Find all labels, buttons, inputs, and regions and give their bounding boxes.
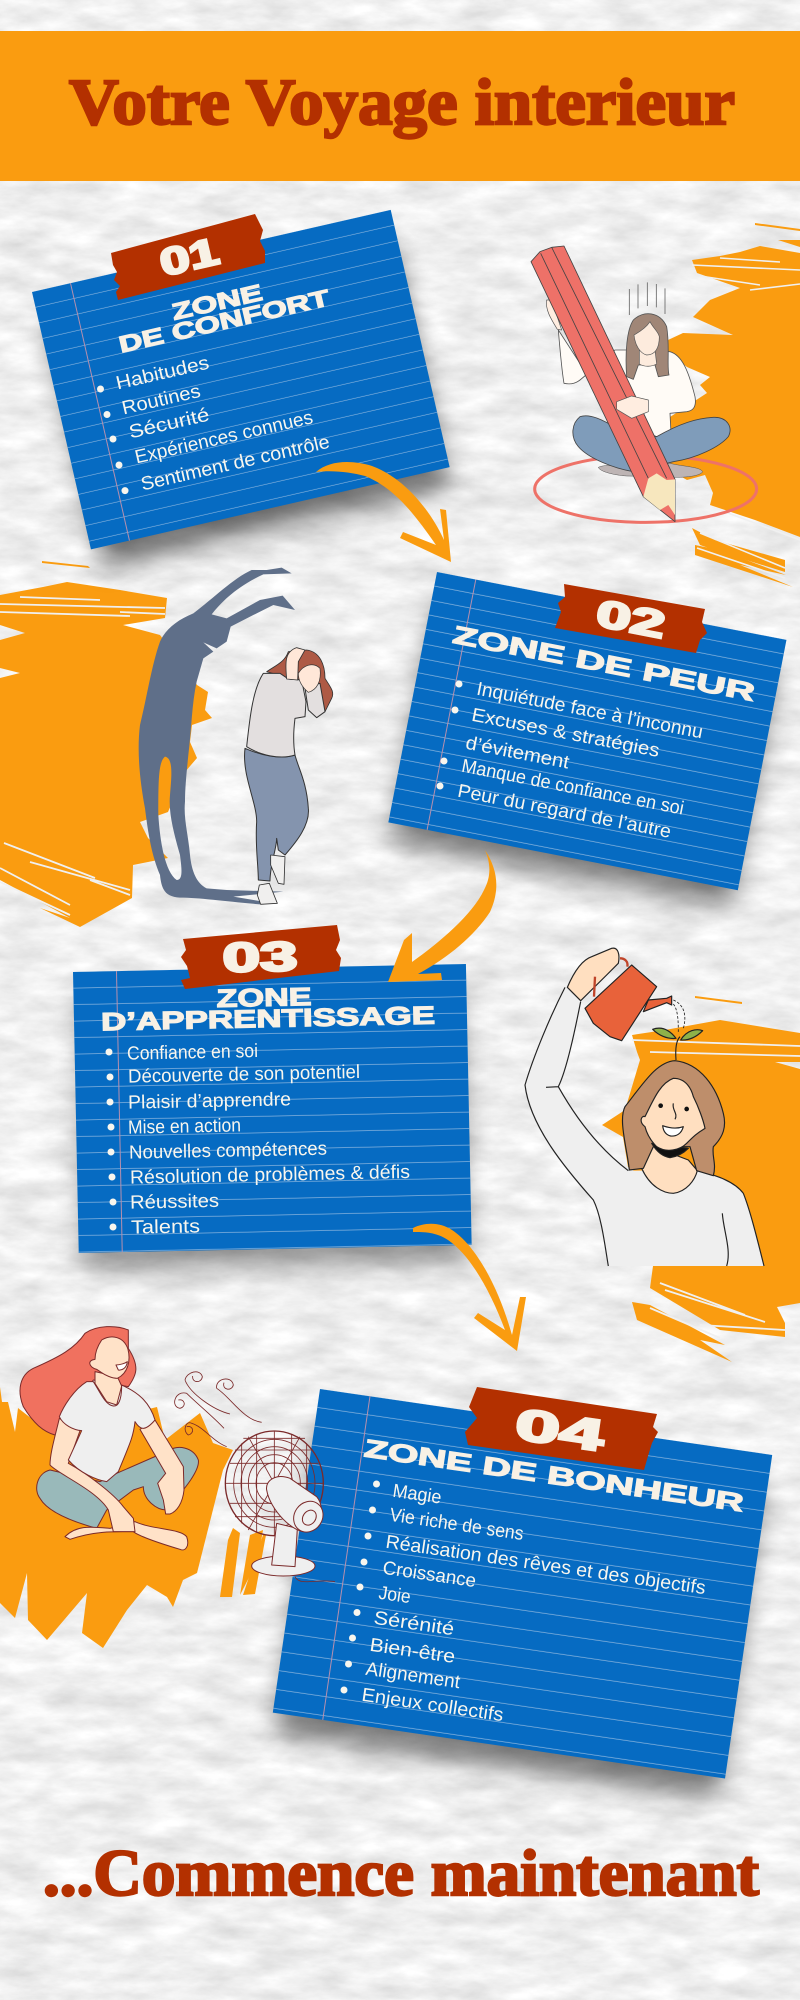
orange brush stroke: left: [0, 561, 212, 927]
number tag 04: [465, 1387, 658, 1470]
list: zone de bonheur: Alignement: [364, 1659, 462, 1693]
arrow: zone 1 to zone 2: [316, 462, 451, 562]
list: zone d'apprentissage: Talents: [131, 1216, 200, 1239]
list: zone d'apprentissage: Plaisir d’apprendre: [128, 1089, 291, 1114]
list: zone de confort: Habitudes: [114, 353, 211, 394]
heading: zone de peur: ZONE DE PEUR: [450, 621, 757, 707]
illustration: desk fan: [175, 1372, 335, 1582]
list: zone d'apprentissage: [106, 1041, 410, 1239]
panel: zone de peur: [388, 572, 786, 907]
heading: zone d'apprentissage: D’APPRENTISSAGE: [101, 1002, 435, 1036]
list: zone de confort: [97, 353, 332, 495]
closing text: ...Commence maintenant: [43, 1837, 759, 1910]
note sheet 2: [388, 572, 786, 890]
heading: zone de bonheur: ZONE DE BONHEUR: [362, 1434, 745, 1517]
list: zone de bonheur: Vie riche de sens: [388, 1505, 525, 1545]
note sheet 3: [73, 964, 472, 1253]
heading: zone de confort: DE CONFORT: [116, 284, 332, 358]
list: zone de confort: Routines: [120, 381, 203, 419]
illustration: frightened woman and shadow: [139, 568, 333, 904]
number tag 01: 01: [156, 231, 223, 285]
panel: zone de bonheur: [273, 1387, 772, 1799]
list: zone de bonheur: Enjeux collectifs: [360, 1685, 505, 1726]
panel: zone de confort: [32, 210, 450, 567]
list: zone de peur: [436, 679, 705, 843]
shadow figure: [139, 568, 295, 904]
illustration: woman with giant pencil: [531, 246, 757, 522]
orange brush stroke: right middle: [602, 996, 800, 1362]
list: zone d'apprentissage: Découverte de son potentiel: [128, 1062, 360, 1088]
list: zone de bonheur: Sérénité: [372, 1608, 456, 1640]
list: zone de peur: Peur du regard de l’autre: [456, 781, 673, 843]
arrow: zone 2 to zone 3: [388, 850, 496, 982]
list: zone de bonheur: Bien-être: [368, 1635, 456, 1668]
list: zone de confort: Sentiment de contrôle: [139, 432, 332, 495]
number tag 02: 02: [593, 593, 668, 647]
panel: zone d'apprentissage: [73, 925, 472, 1270]
list: zone d'apprentissage: Mise en action: [128, 1115, 241, 1139]
arrow: zone 3 to zone 4: [413, 1224, 526, 1351]
orange brush stroke: top right: [668, 223, 800, 587]
title: Votre Voyage interieur: [69, 66, 735, 139]
list: zone de bonheur: Magie: [391, 1481, 443, 1509]
heading: zone de confort: ZONE: [169, 279, 265, 325]
list: zone de bonheur: Joie: [377, 1583, 412, 1608]
heading: zone d'apprentissage: [101, 983, 435, 1036]
note sheet 1: [32, 210, 450, 549]
list: zone de bonheur: [340, 1480, 707, 1726]
number tag 02: [555, 584, 707, 653]
red circle: [535, 456, 757, 522]
number tag 03: [181, 925, 341, 989]
list: zone d'apprentissage: Résolution de problèmes & défis: [130, 1162, 410, 1189]
list: zone d'apprentissage: Nouvelles compétences: [129, 1139, 327, 1164]
list: zone d'apprentissage: Confiance en soi: [127, 1041, 258, 1065]
list: zone de confort: Expériences connues: [133, 407, 315, 468]
list: zone de peur: Excuses & stratégies: [470, 705, 661, 762]
illustration: woman watering sprout: [525, 948, 764, 1266]
heading: zone de confort: [116, 279, 332, 358]
list: zone de bonheur: Réalisation des rêves et des objectifs: [384, 1532, 707, 1599]
illustration: relaxed woman: [20, 1327, 198, 1550]
list: zone de confort: Sécurité: [127, 405, 212, 443]
list: zone de peur: d’évitement: [464, 733, 572, 774]
list: zone de bonheur: Croissance: [381, 1558, 477, 1592]
note sheet 4: [273, 1389, 772, 1779]
number tag 03: 03: [222, 933, 298, 981]
number tag 04: 04: [512, 1400, 608, 1461]
list: zone de peur: Manque de confiance en soi: [460, 756, 686, 820]
header band: [0, 31, 800, 181]
list: zone de peur: Inquiétude face à l’inconnu: [475, 679, 705, 743]
heading: zone d'apprentissage: ZONE: [216, 983, 312, 1013]
orange brush stroke: lower left: [0, 1387, 266, 1648]
list: zone d'apprentissage: Réussites: [130, 1191, 219, 1214]
number tag 01: [111, 214, 265, 300]
